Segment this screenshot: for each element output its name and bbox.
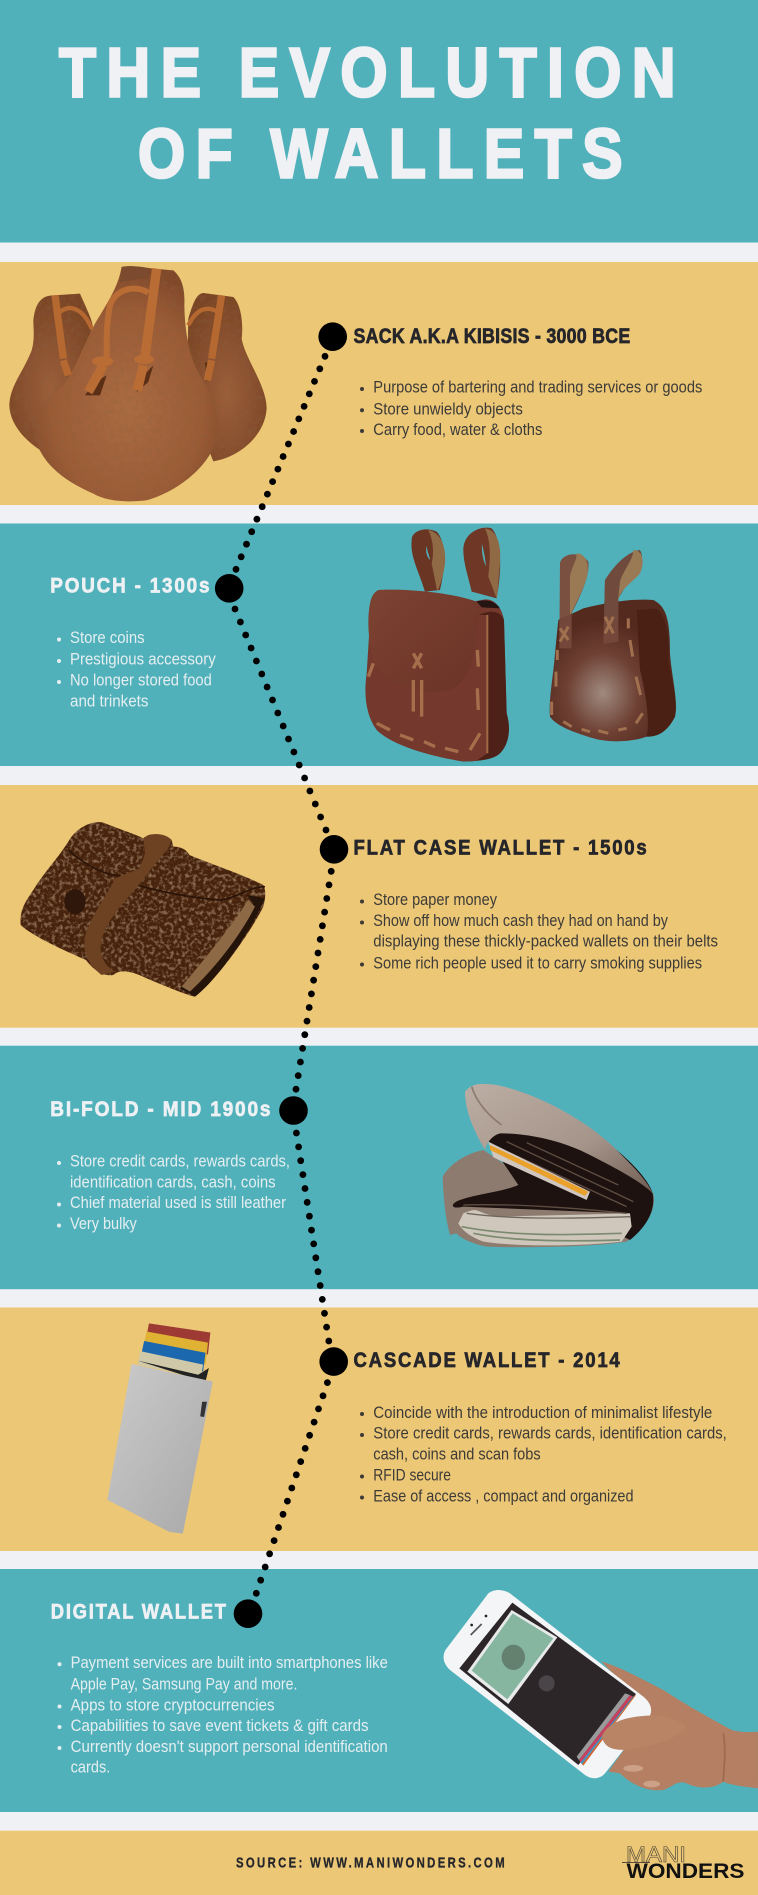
bullet list: Chief material used is still leather [70, 1194, 286, 1212]
panel: bi-fold [0, 1046, 758, 1289]
logo: Mani Wonders [622, 1842, 744, 1883]
bullet list: Some rich people used it to carry smoking supplies [373, 954, 702, 972]
title line 2: OF WALLETS [138, 115, 633, 193]
bullet list: Payment services are built into smartphones like [71, 1654, 388, 1672]
image: leather sacks [9, 266, 267, 501]
panel: cascade wallet [0, 1308, 758, 1551]
image: bulky bi-fold wallet [443, 1084, 654, 1247]
panel: footer [0, 1831, 758, 1895]
bullet list [360, 891, 718, 972]
panel: pouch [0, 524, 758, 766]
bullet list: Purpose of bartering and trading services or goods [373, 379, 702, 397]
bullet list [58, 1654, 388, 1777]
panel: sack [0, 262, 758, 505]
bullet list: displaying these thickly-packed wallets on their belts [373, 933, 718, 951]
bullet list: Apple Pay, Samsung Pay and more. [71, 1675, 297, 1693]
bullet list [360, 379, 702, 439]
image: aluminium card wallet [107, 1323, 213, 1534]
bullet list: cards. [71, 1759, 110, 1777]
panel: title banner [0, 0, 758, 242]
image: old flat leather wallet [21, 822, 265, 997]
heading: FLAT CASE WALLET - 1500s [354, 836, 648, 859]
bullet list: Carry food, water & cloths [373, 421, 542, 439]
bullet list [360, 1404, 727, 1505]
heading: BI-FOLD - MID 1900s [50, 1098, 272, 1121]
bullet list: Apps to store cryptocurrencies [71, 1697, 275, 1715]
panel: digital wallet [0, 1569, 758, 1812]
heading: POUCH - 1300s [50, 575, 211, 598]
bullet list: Store unwieldy objects [373, 400, 523, 418]
heading: DIGITAL WALLET [51, 1600, 228, 1623]
image: leather pouches [365, 528, 676, 762]
bullet list: cash, coins and scan fobs [373, 1446, 541, 1464]
logo: Mani Wonders: WONDERS [626, 1859, 744, 1883]
heading: SACK A.K.A KIBISIS - 3000 BCE [354, 325, 630, 348]
bullet list: RFID secure [373, 1466, 451, 1484]
bullet list: Show off how much cash they had on hand by [373, 912, 669, 930]
bullet list: Capabilities to save event tickets & gift cards [71, 1717, 369, 1735]
bullet list: Currently doesn't support personal identification [71, 1738, 388, 1756]
bullet list: Store coins [70, 629, 145, 647]
bullet list [57, 629, 216, 711]
bullet list: and trinkets [70, 693, 148, 711]
heading: CASCADE WALLET - 2014 [354, 1349, 622, 1372]
bullet list: Ease of access , compact and organized [373, 1487, 634, 1505]
bullet list: Store credit cards, rewards cards, identification cards, [373, 1425, 727, 1443]
bullet list: Very bulky [70, 1215, 137, 1233]
bullet list: Store paper money [373, 891, 498, 909]
bullet list: No longer stored food [70, 672, 212, 690]
bullet list: Prestigious accessory [70, 650, 216, 668]
logo: Mani Wonders: MANI [626, 1842, 686, 1867]
bullet list: Coincide with the introduction of minimalist lifestyle [373, 1404, 712, 1422]
bullet list [57, 1153, 290, 1233]
bullet list: Store credit cards, rewards cards, [70, 1153, 290, 1171]
bullet list: identification cards, cash, coins [70, 1174, 276, 1192]
timeline: dotted path with milestones [215, 322, 348, 1628]
source line: SOURCE: WWW.MANIWONDERS.COM [236, 1856, 507, 1872]
panel: flat case wallet [0, 785, 758, 1028]
image: hand holding smartphone [444, 1590, 758, 1790]
